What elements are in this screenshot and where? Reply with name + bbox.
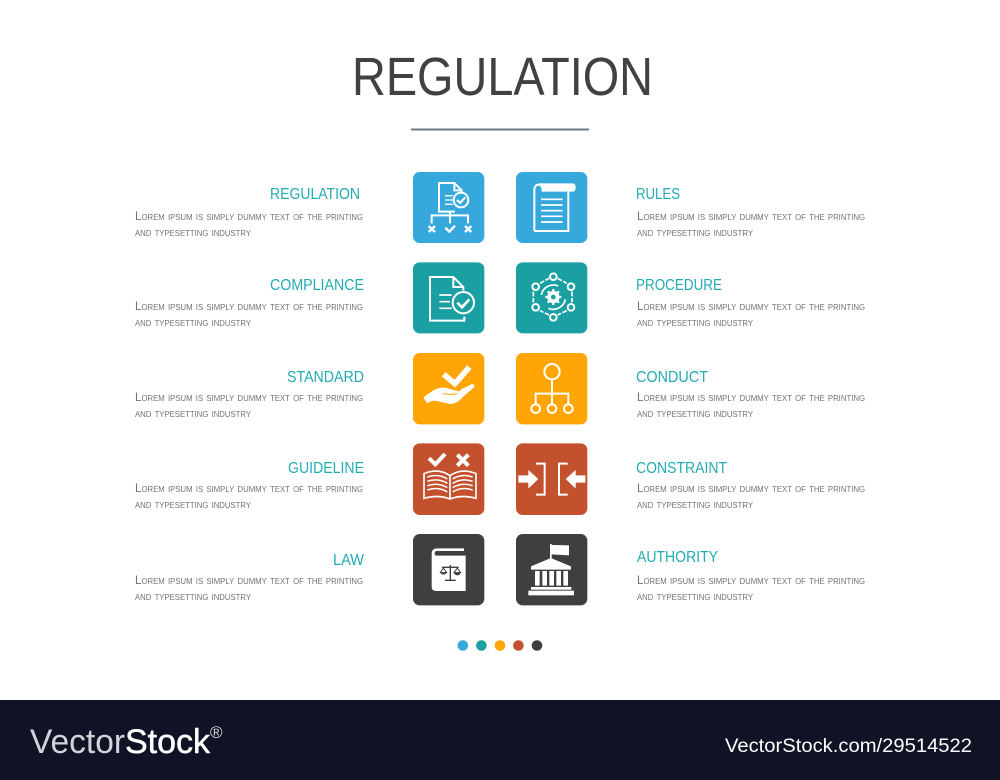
footer logo: ® [210,723,223,742]
footer bar [0,700,1000,780]
text block: law: LAW [333,552,365,569]
icon: rules scroll [516,172,587,243]
text block: compliance: COMPLIANCE [270,277,364,294]
text block: compliance [135,277,364,329]
text block: regulation: REGULATION [270,186,360,203]
footer logo [30,723,223,761]
text block: constraint [636,460,865,511]
icon: guideline open book [413,443,484,515]
text block: procedure [636,277,865,329]
icon: procedure gear network [516,262,587,333]
text block: law: and typesetting industry [135,589,252,603]
text block: law [135,552,365,603]
footer logo: Vector [30,723,125,761]
text block: constraint: Lorem ipsum is simply dummy text of the printing [637,481,865,495]
text block: guideline: and typesetting industry [135,497,252,511]
text block: standard: Lorem ipsum is simply dummy text of the printing [135,390,363,404]
text block: rules: and typesetting industry [637,225,754,239]
text block: guideline: Lorem ipsum is simply dummy text of the printing [135,481,363,495]
text block: compliance: and typesetting industry [135,315,252,329]
text block: rules: RULES [636,186,680,203]
text block: conduct: Lorem ipsum is simply dummy text of the printing [637,390,865,404]
text block: procedure: and typesetting industry [637,315,754,329]
text block: constraint: and typesetting industry [637,497,754,511]
text block: rules: Lorem ipsum is simply dummy text of the printing [637,209,865,223]
text block: guideline: GUIDELINE [288,460,364,477]
text block: standard [135,369,364,420]
pagination dots [458,640,542,651]
text block: authority [637,549,865,603]
text block: rules [636,186,865,239]
icon: regulation document tree [413,172,484,243]
text block: authority: and typesetting industry [637,589,754,603]
icon: conduct hierarchy [516,353,587,424]
text block: conduct [636,369,865,420]
text block: regulation: and typesetting industry [135,225,252,239]
text block: compliance: Lorem ipsum is simply dummy text of the printing [135,299,363,313]
text block: procedure: Lorem ipsum is simply dummy text of the printing [637,299,865,313]
text block: law: Lorem ipsum is simply dummy text of the printing [135,573,363,587]
footer image id: VectorStock.com/29514522 [725,736,972,757]
text block: conduct: and typesetting industry [637,406,754,420]
title: REGULATION [352,47,653,107]
text block: authority: Lorem ipsum is simply dummy text of the printing [637,573,865,587]
icon: authority government building [516,534,587,605]
text block: regulation: Lorem ipsum is simply dummy text of the printing [135,209,363,223]
text block: guideline [135,460,364,511]
icon: compliance document check [413,262,484,333]
text block: regulation [135,186,363,239]
text block: standard: and typesetting industry [135,406,252,420]
icon: standard hand with check [413,353,484,424]
text block: conduct: CONDUCT [636,369,708,386]
text block: standard: STANDARD [287,369,364,386]
icon: constraint arrows [516,443,587,515]
text block: authority: AUTHORITY [637,549,718,566]
text block: procedure: PROCEDURE [636,277,722,294]
text block: constraint: CONSTRAINT [636,460,727,477]
footer logo: Stock [125,723,211,761]
icon: law book with scales [413,534,484,605]
